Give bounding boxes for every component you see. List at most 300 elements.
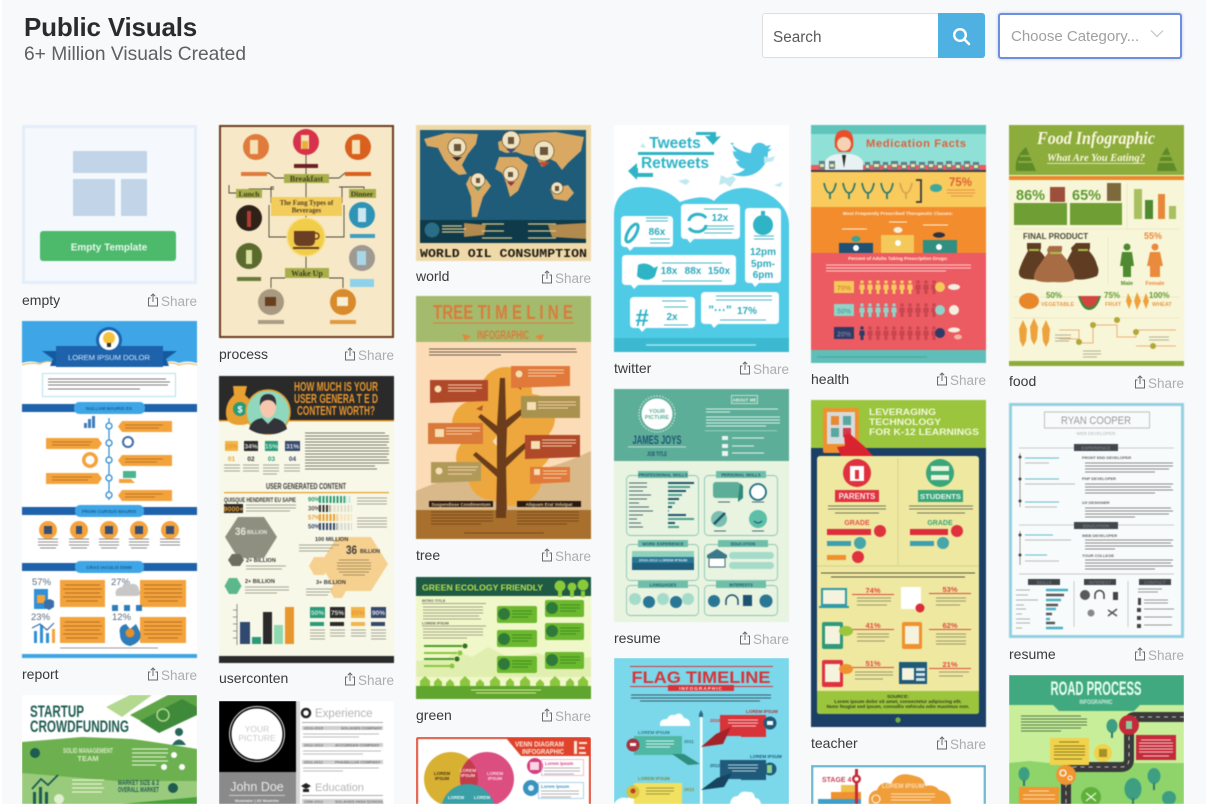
navy flag: 2012 (710, 763, 721, 768)
education: Education (315, 782, 364, 794)
timeline boxes (428, 366, 580, 484)
section bar 3 (22, 561, 197, 573)
panel (817, 456, 979, 714)
thumbnail: user content: 100 MILLION (315, 537, 348, 543)
map title: WORLD OIL CONSUMPTION (420, 247, 587, 261)
title: Public Visuals (24, 12, 197, 42)
four boxes: 75% (331, 610, 344, 617)
icon row (38, 521, 180, 548)
education rows: YOUR COLLEGE (1082, 553, 1114, 558)
photo placeholder: YOUR (245, 724, 269, 734)
venn circles (424, 752, 514, 804)
orange hexagon: 36 (346, 543, 357, 557)
four boxes: 50% (311, 610, 324, 617)
experience: SOLAGES COMPANY (341, 726, 382, 730)
money (106, 695, 197, 733)
heading (628, 132, 721, 180)
experience: Experience (315, 708, 373, 720)
thumbnail: teacher (811, 400, 986, 727)
yellow flag: LOREM IPSUM (638, 776, 670, 781)
money bag (226, 386, 254, 425)
experience (302, 708, 383, 771)
card: userconten (218, 375, 395, 688)
step one (30, 746, 113, 763)
step two: OVERALL MARKET (118, 785, 159, 794)
search box (762, 13, 985, 58)
search button (938, 13, 985, 58)
pictogram rows: 57% (308, 516, 321, 522)
red flag: LOREM IPSUM (746, 709, 778, 714)
heading: Food Infographic (1036, 128, 1155, 148)
heading (433, 302, 574, 342)
experience: ACCUMSAN COMPANY (335, 742, 380, 748)
stat 75%: 75% (949, 177, 972, 189)
statistics: 6pm (753, 270, 773, 281)
heading: TECHNOLOGY (869, 417, 942, 428)
button: empty template: Empty Template (71, 242, 148, 254)
skills: SKILLS (1036, 580, 1052, 585)
pictogram rows: 50% (308, 524, 321, 530)
stats: 53% (942, 585, 958, 594)
stage label: STAGE 4 (822, 777, 852, 784)
photo circle: PICTURE (645, 415, 669, 421)
name (628, 435, 686, 458)
education panel: EDUCATION (731, 542, 755, 546)
gray hexagon (225, 517, 277, 566)
section bar 3: CRAS IACULIS ENIM (86, 565, 132, 570)
name: John Doe (230, 780, 284, 794)
work experience panel (626, 540, 698, 580)
card: world (416, 124, 592, 286)
trees (1018, 719, 1176, 804)
four stats: 03 (268, 456, 275, 463)
heading: FLAG TIMELINE (632, 668, 770, 687)
share: Share (161, 668, 197, 683)
section bar 1 (22, 402, 197, 414)
venn circles: IPSUM (488, 776, 502, 781)
card: report (21, 320, 198, 683)
teal flag (626, 730, 700, 765)
statistics: 5pm- (751, 259, 775, 270)
stacked blocks (841, 785, 857, 793)
row 70% (834, 280, 960, 294)
share (739, 632, 789, 648)
four stats: 04 (289, 456, 296, 463)
name box: RYAN COOPER (1061, 415, 1131, 427)
stethoscopes (824, 180, 921, 202)
people: Female (1146, 281, 1164, 287)
step one: SOLID MANAGEMENT (63, 746, 113, 755)
boxes: Beverages (292, 208, 322, 214)
ribbon heading (42, 327, 177, 367)
produce row: WHEAT (1152, 302, 1172, 308)
work experience panel: WORK EXPERIENCE (642, 542, 684, 546)
card: teal resume (613, 388, 790, 647)
teal flag: 2011 (684, 739, 694, 744)
professional skills panel: PROFESSIONAL SKILLS (638, 472, 688, 478)
photo placeholder: PICTURE (238, 733, 276, 743)
boxes: The Fang Types of (280, 200, 334, 207)
four stats: 34% (244, 444, 258, 450)
dropdown placeholder: Choose Category... (1011, 28, 1139, 45)
share (740, 361, 789, 377)
icon: bird (730, 143, 772, 176)
timeline (699, 710, 703, 804)
pictogram rows: 30% (308, 506, 321, 512)
share (1134, 648, 1184, 664)
venn circles: IPSUM (435, 776, 449, 781)
share: Share (950, 737, 986, 752)
subtitle: 6+ Million Visuals Created (24, 44, 246, 65)
thumbnail: user content: 2+ BILLION (245, 579, 275, 585)
share: Share (555, 271, 591, 286)
label: green (416, 707, 452, 723)
red flag (701, 709, 778, 747)
card: health (810, 124, 987, 388)
thumbnail: world map (416, 124, 592, 262)
name (229, 780, 285, 803)
thumbnail: tree timeline (415, 295, 592, 540)
boxes: Dinner (351, 190, 374, 198)
experience rows: PHP DEVELOPER (1082, 476, 1116, 481)
card: teacher (811, 400, 986, 758)
red section: Percent of Adults Taking Prescription Drugs: (848, 256, 948, 261)
education band (1019, 522, 1174, 529)
row 50%: 50% (837, 308, 852, 316)
row 50% (834, 303, 959, 317)
label: tree (416, 547, 440, 563)
experience band (1019, 444, 1174, 451)
label: report (22, 666, 59, 682)
clouds (660, 714, 761, 804)
people (1120, 231, 1164, 287)
parents: PARENTS (839, 492, 875, 501)
education rows (1018, 531, 1173, 569)
thumbnail: food (1008, 124, 1185, 367)
card: twitter (613, 131, 790, 377)
category dropdown (998, 13, 1182, 59)
heading: STARTUP (30, 703, 84, 721)
statistics: 12x (712, 213, 729, 224)
search placeholder: Search (773, 29, 821, 46)
intro text (42, 374, 176, 396)
card: startup crowdfunding (22, 695, 197, 804)
education band: EDUCATION (1083, 524, 1109, 528)
red section (826, 256, 971, 271)
stats: 57% (32, 577, 52, 588)
heading (1036, 128, 1155, 164)
statistics: 12pm (750, 247, 776, 258)
share: Share (358, 673, 394, 688)
label: health (811, 371, 849, 387)
banner (1009, 675, 1184, 711)
row 20%: 20% (837, 332, 852, 338)
stat 86% 65% (1014, 183, 1122, 225)
stats: 62% (942, 621, 958, 630)
red header: INFOGRAPHIC (522, 749, 564, 756)
yellow flag (626, 776, 695, 804)
hill and foliage (416, 451, 591, 511)
four stats (225, 441, 300, 463)
thumbnail: user content: 2+ BILLION (246, 558, 276, 564)
sub headings: Suspendisse Condimentum (431, 502, 491, 507)
share: Share (555, 709, 591, 724)
card: john doe resume (219, 701, 384, 804)
four boxes (310, 607, 386, 626)
navy flag: LOREM IPSUM (750, 754, 782, 759)
icon: tablet (823, 408, 873, 456)
pins (1056, 715, 1139, 785)
label: world (416, 268, 449, 284)
thumbnail: road process (1009, 675, 1184, 804)
banner: INFOGRAPHIC (1080, 699, 1113, 706)
four stats: 20% (225, 444, 238, 450)
venn circles: LOREM (434, 771, 450, 776)
thumbnail: venn diagram (416, 737, 591, 804)
students: STUDENTS (920, 492, 961, 501)
label: empty (22, 292, 60, 308)
process lines (1019, 317, 1176, 357)
road (1066, 717, 1184, 804)
statistics: 86x (649, 227, 666, 238)
experience: 2013-2015 (304, 726, 324, 730)
stats: 41% (865, 621, 881, 630)
work experience panel: 2010-2012 LOREM IPSUM (639, 558, 688, 562)
green hexagon (224, 578, 242, 594)
share (542, 548, 591, 564)
share: Share (1148, 648, 1184, 663)
experience band: EXPERIENCE (1081, 446, 1111, 450)
continents (424, 132, 584, 217)
team (172, 728, 186, 745)
stat 75% (947, 177, 975, 196)
legend items (523, 758, 584, 798)
left text: LOREM IPSUM (422, 622, 449, 626)
step two (32, 775, 178, 804)
navy flag (701, 754, 782, 790)
card: stage (811, 765, 986, 804)
personal skills panel: PERSONAL SKILLS (721, 472, 761, 478)
bar chart (1014, 183, 1179, 318)
card: process (218, 124, 395, 363)
thumbnail: twitter: "···" (708, 303, 732, 317)
heading: CROWDFUNDING (30, 718, 129, 736)
label: twitter (614, 360, 651, 376)
produce row: 100% (1149, 291, 1169, 300)
label: userconten (219, 670, 288, 686)
experience: PHASELLUS COMPANY (335, 760, 381, 764)
button: empty template (40, 231, 176, 261)
bottom data band (420, 220, 586, 243)
section bar 2: PROIN CURSUS MAURIS (82, 509, 136, 514)
experience: 2011-2012 (304, 760, 324, 764)
ribbon heading: LOREM IPSUM DOLOR (68, 353, 150, 362)
9000 badge (224, 504, 296, 514)
produce row: VEGETABLE (1041, 302, 1075, 308)
venn circles: LOREM (460, 768, 476, 773)
stats: 74% (865, 586, 881, 595)
thumbnail: user content: 3+ BILLION (316, 580, 346, 586)
icon: magnifier (953, 28, 970, 46)
thumbnail: green ecology (415, 576, 592, 700)
share: Share (555, 549, 591, 564)
row 20% (834, 326, 962, 340)
stats (31, 577, 132, 623)
label: food (1009, 373, 1036, 389)
card: venn (416, 737, 591, 804)
four boxes: 85% (351, 610, 365, 617)
heading: FOR K-12 LEARNINGS (869, 427, 979, 438)
share: Share (1148, 376, 1184, 391)
share (148, 667, 197, 683)
label: resume (1009, 646, 1056, 662)
photo circle: YOUR (649, 409, 665, 415)
thumbnail: john doe resume (219, 701, 384, 804)
thumbnail: report (21, 320, 198, 659)
thumbnail: user content: QUISQUE HENDRERIT EU SAPIE (224, 497, 296, 504)
students (909, 459, 973, 549)
photo circle (639, 396, 675, 432)
thumbnail: ryan cooper resume (1009, 403, 1184, 638)
heading: LEVERAGING (869, 407, 936, 418)
thumbnail: empty template (22, 125, 197, 284)
card: flag timeline (614, 658, 789, 804)
doctor (825, 130, 863, 170)
trunk (473, 378, 531, 517)
share: Share (753, 632, 789, 647)
share (542, 270, 591, 286)
card: road process (1009, 675, 1184, 804)
about: ABOUT ME (732, 398, 756, 402)
name box (1044, 412, 1150, 436)
produce row: FRUIT (1105, 302, 1122, 308)
intro text (305, 433, 389, 469)
left text: INTRO TITLE (422, 599, 446, 603)
stats: 27% (111, 577, 131, 588)
legend items: Lorem ipsum (541, 784, 569, 789)
produce row (1019, 291, 1172, 310)
heading (630, 666, 773, 691)
four stats: 31% (286, 444, 299, 450)
heading (30, 703, 129, 736)
thumbnail: teal resume (613, 388, 790, 622)
share (1135, 375, 1184, 391)
red flag: 2010 (710, 718, 721, 723)
thumbnail: crowdfunding (22, 695, 197, 804)
stats: 23% (31, 612, 51, 623)
section bar 1: NULLAM MAURIS EX (86, 406, 133, 411)
four stats: 02 (247, 456, 255, 463)
interest: INTEREST (1089, 580, 1111, 585)
orange cloud: LOREM IPSUM (882, 784, 924, 790)
interest (1080, 579, 1118, 616)
education panel (704, 540, 778, 580)
red header (417, 738, 591, 804)
name: Illustrator | 3D Modeller (235, 798, 280, 803)
share: Share (753, 362, 789, 377)
red pole (852, 769, 861, 804)
teal flag: LOREM IPSUM (638, 730, 670, 735)
source: Lorem ipsum dolor sit amet, consectetur adipiscing elit. (834, 699, 962, 705)
statistics: 150x (708, 266, 731, 277)
share (936, 737, 986, 753)
education: SOLAGES HIGH SCHOOL (335, 799, 384, 804)
four stats: 15% (265, 444, 278, 450)
pill bottles (819, 161, 979, 170)
row 70%: 70% (837, 286, 852, 292)
contact: CONTACT (1144, 580, 1166, 585)
heading: INFOGRAPHIC (477, 328, 529, 342)
progress bars (424, 644, 468, 668)
thumbnail: flag timeline (614, 658, 789, 804)
share (345, 672, 394, 688)
portrait (246, 390, 290, 434)
legend items: Lorem ipsum (545, 761, 573, 766)
four boxes: 90% (372, 610, 385, 617)
bar chart (233, 604, 294, 645)
share (345, 347, 394, 363)
stats (865, 585, 958, 669)
statistics (649, 213, 776, 323)
interests panel (704, 581, 778, 616)
languages panel: LANGUAGES (650, 582, 677, 588)
share (937, 372, 986, 388)
heading: Retweets (641, 155, 709, 172)
label: teacher (811, 735, 858, 751)
orange hexagon (309, 537, 388, 598)
skills (1016, 579, 1068, 628)
card: green (415, 576, 592, 724)
name box: WEB DEVELOPER (1076, 431, 1116, 436)
boxes: Breakfast (290, 174, 323, 184)
card: tree (415, 295, 592, 564)
heading: What Are You Eating? (1047, 153, 1145, 164)
source (827, 694, 969, 710)
heading: Tweets (649, 135, 701, 152)
card: ryan cooper resume (1009, 403, 1184, 670)
heading (869, 407, 979, 438)
thumbnail: user content (218, 375, 395, 664)
label: resume (614, 630, 661, 646)
statistics: 88x (685, 266, 702, 277)
step two: MARKET SIZE & 2 (118, 778, 159, 787)
icon: chevron (1150, 30, 1164, 38)
card: food (1008, 124, 1185, 391)
thumbnail: process (218, 124, 395, 339)
professional skills panel (626, 471, 698, 536)
gray hexagon: 36 (235, 526, 246, 538)
gray hexagon: BILLION (247, 530, 267, 536)
thumbnail: twitter: # (635, 305, 649, 332)
pictogram rows: 90% (308, 498, 321, 504)
boxes: Wake Up (291, 269, 323, 278)
four stats: 01 (228, 456, 235, 463)
name: JAMES JOYS (632, 435, 682, 447)
source: SOURCE: (887, 694, 909, 700)
icon circles (236, 129, 375, 315)
parents (827, 459, 886, 563)
icon: bulbs (554, 580, 588, 597)
stats: 12% (112, 612, 132, 623)
statistics: 18x (661, 266, 678, 277)
education: 1998-2012 (304, 799, 324, 804)
produce row: 50% (1046, 291, 1062, 300)
orange section (839, 211, 957, 253)
left text (422, 599, 486, 638)
share (148, 293, 197, 309)
heading: INFOGRAPHIC (679, 686, 723, 691)
money bag: $ (237, 404, 243, 414)
